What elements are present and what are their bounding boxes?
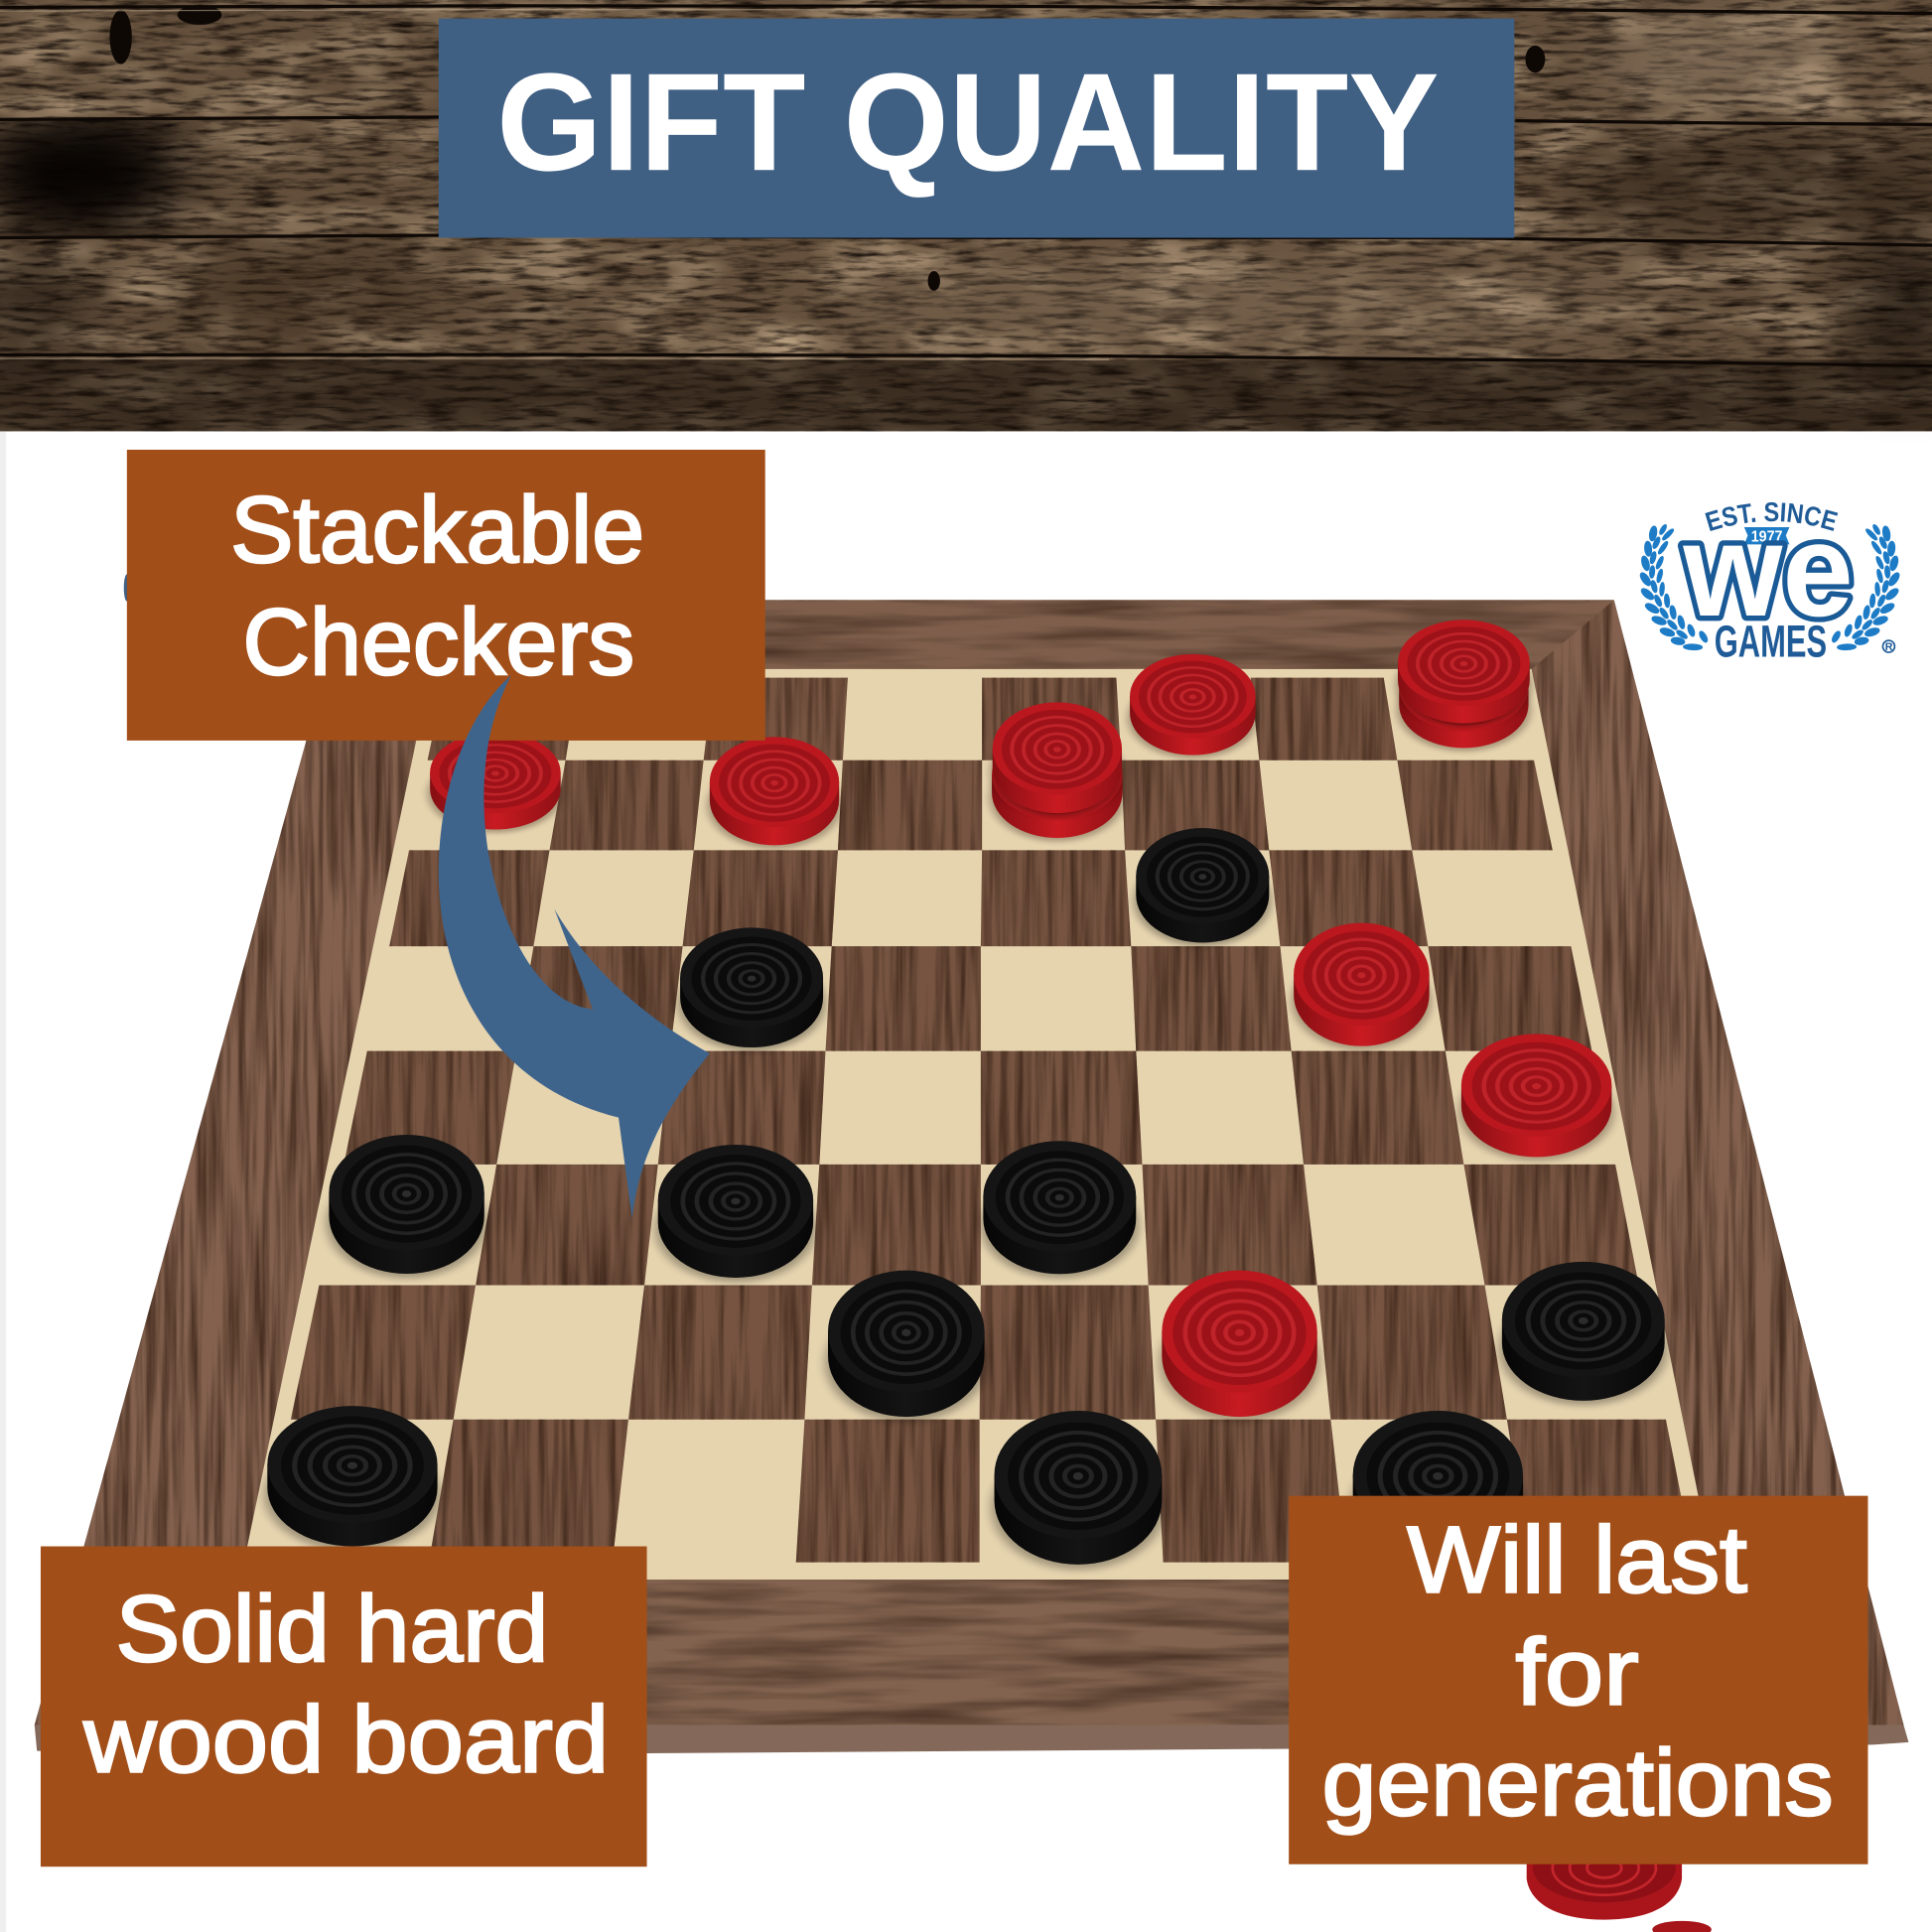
- est since: EST. SINCE: [1705, 502, 1839, 531]
- logo: WE Games est. since 1977: [1640, 496, 1900, 667]
- registered mark: [1882, 640, 1894, 653]
- red checkers: [428, 620, 1614, 1422]
- callout: stackable checkers: Checkers: [242, 590, 634, 694]
- callout: solid hard wood board: [41, 1547, 647, 1866]
- title banner: [439, 19, 1514, 238]
- bottom frame rail: [50, 1580, 1861, 1725]
- we wordmark: we: [1682, 496, 1854, 644]
- board frame: [35, 600, 1903, 1725]
- 1977 ribbon: 1977: [1751, 529, 1783, 546]
- callout: will last for generations: generations: [1322, 1730, 1834, 1835]
- arrow: [439, 675, 710, 1218]
- top frame rail: [345, 600, 1614, 669]
- callout: stackable checkers: [124, 450, 765, 741]
- brown squares: [291, 678, 1694, 1563]
- callout: will last for generations: Will last: [1407, 1507, 1747, 1611]
- callout: will last for generations: [1289, 1496, 1867, 1864]
- callout: solid hard wood board: wood board: [82, 1688, 609, 1792]
- laurel right: [1831, 524, 1901, 650]
- laurel left: [1638, 524, 1709, 650]
- red checker off board: [1527, 1834, 1712, 1932]
- checkers board: [35, 600, 1908, 1753]
- black checkers: [264, 828, 1668, 1570]
- panel: wood plank header: [0, 0, 1932, 431]
- light inlay field: [240, 669, 1716, 1580]
- callout: will last for generations: for: [1516, 1619, 1639, 1724]
- left edge strip: [0, 431, 6, 1932]
- board side edge: [35, 1725, 1908, 1753]
- title banner: GIFT QUALITY: [496, 44, 1440, 200]
- callout: stackable checkers: Stackable: [230, 478, 644, 582]
- callout: solid hard wood board: Solid hard: [116, 1577, 548, 1681]
- games: GAMES: [1715, 617, 1827, 667]
- registered mark: R: [1885, 641, 1893, 653]
